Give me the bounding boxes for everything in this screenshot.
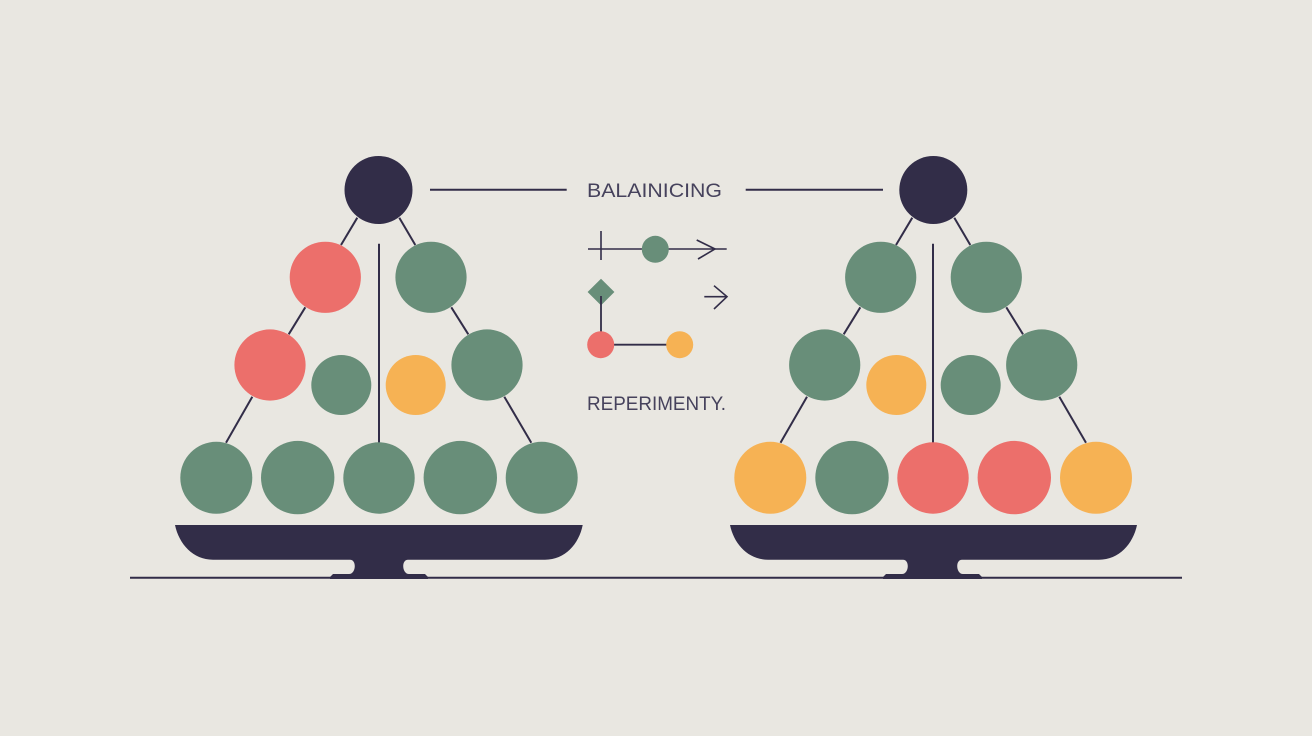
left top node (344, 156, 412, 224)
left scale base (175, 525, 583, 579)
right third row nodes (789, 329, 1077, 415)
panel: left pyramid scale (175, 156, 583, 579)
panel: right pyramid scale (730, 156, 1137, 579)
icon: right arrow (704, 286, 727, 309)
left header rule (430, 189, 567, 191)
right header rule (746, 189, 883, 191)
text: reperimenty label: REPERIMENTY. (587, 394, 726, 415)
left bottom row nodes (180, 441, 578, 514)
right bottom row nodes (734, 441, 1132, 514)
left connector lines (226, 218, 531, 443)
left third row nodes (234, 329, 523, 415)
heading: balancing label: BALAINICING (587, 181, 722, 202)
ground line (130, 577, 1182, 579)
right scale base (730, 525, 1137, 579)
icon: line with node and arrow (588, 231, 727, 263)
icon: diamond and nodes flow (587, 279, 693, 358)
right connector lines (780, 218, 1086, 443)
right second row nodes (845, 242, 1022, 313)
right top node (899, 156, 967, 224)
left second row nodes (290, 242, 467, 313)
